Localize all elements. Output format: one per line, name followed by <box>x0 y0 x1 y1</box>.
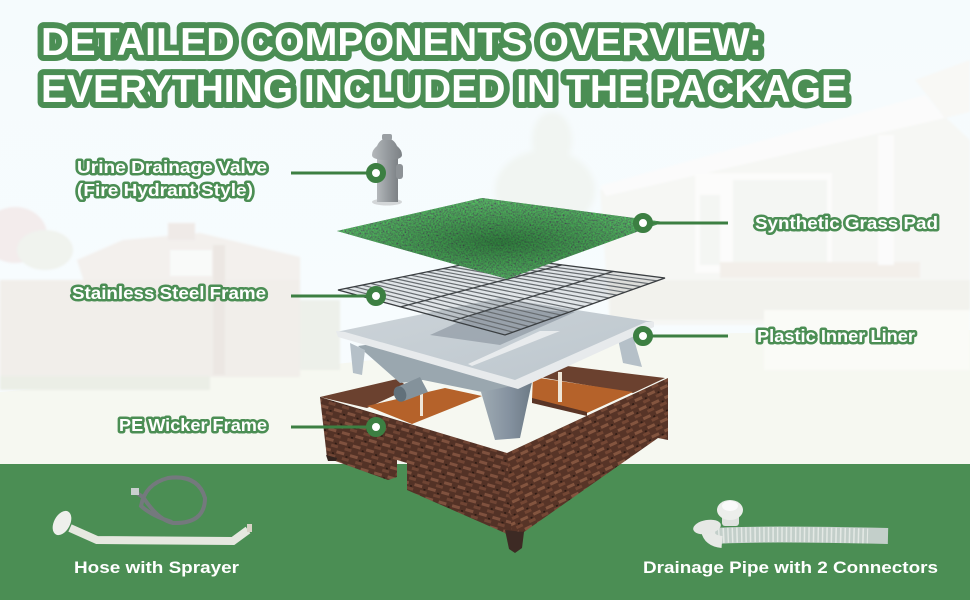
liner funnel body <box>358 340 530 392</box>
pipe elbow <box>707 530 722 542</box>
callout: PE wicker frame: PE Wicker Frame <box>119 415 267 435</box>
icon: drainage pipe with connectors <box>692 500 888 542</box>
liner rim <box>336 322 654 389</box>
urine drainage valve hydrant <box>372 134 403 206</box>
frame outline <box>338 257 665 335</box>
background: right house <box>600 60 970 370</box>
title: DETAILED COMPONENTS OVERVIEW: <box>41 21 762 64</box>
wicker inner orange surface <box>367 372 633 424</box>
hose coil <box>135 477 205 523</box>
hydrant base <box>372 198 402 206</box>
callout: urine drainage valve: Urine Drainage Valve <box>77 157 267 177</box>
green footer band <box>0 464 970 600</box>
frame crossbars <box>401 265 613 321</box>
sprayer tip <box>247 524 252 532</box>
icon: hose with sprayer <box>49 477 252 541</box>
callout: PE wicker frame <box>119 415 383 435</box>
pipe ribs <box>714 534 868 536</box>
callout: urine drainage valve: (Fire Hydrant Style) <box>77 180 253 200</box>
hydrant side nozzle <box>396 164 403 179</box>
wicker front foot <box>505 530 524 553</box>
PE wicker frame <box>320 366 668 553</box>
liner drain spout <box>391 377 428 404</box>
background: tree <box>495 112 595 230</box>
callout: plastic inner liner: Plastic Inner Liner <box>757 326 915 346</box>
title <box>41 21 847 111</box>
wicker back walls <box>320 379 410 408</box>
title: EVERYTHING INCLUDED IN THE PACKAGE <box>41 68 847 111</box>
hose connector <box>131 488 139 495</box>
plastic inner liner <box>336 298 654 440</box>
callout: synthetic grass pad: Synthetic Grass Pad <box>755 213 938 233</box>
sprayer head <box>49 508 75 538</box>
liner tray top <box>336 298 654 386</box>
hydrant dome <box>372 138 402 160</box>
flange connector <box>692 518 722 536</box>
background: lawn <box>0 330 970 464</box>
hydrant body <box>377 158 398 202</box>
liner legs <box>350 343 365 375</box>
pipe body <box>714 534 888 536</box>
callout: stainless steel frame: Stainless Steel Frame <box>72 283 266 303</box>
background: left house and fence <box>0 207 340 390</box>
socket connector <box>717 500 743 526</box>
synthetic grass pad <box>337 198 664 279</box>
frame rods <box>346 259 657 332</box>
callout: urine drainage valve <box>77 157 383 200</box>
stainless steel frame <box>338 257 665 335</box>
callout: synthetic grass pad <box>636 213 938 233</box>
background: faded backyard scene <box>0 0 970 464</box>
wicker right wall <box>507 378 668 538</box>
callout: stainless steel frame <box>72 283 383 303</box>
hydrant top nut <box>382 134 392 140</box>
callout: plastic inner liner <box>636 326 915 346</box>
label: drainage pipe with 2 connectors: Drainage Pipe with 2 Connectors <box>643 558 938 577</box>
label: hose with sprayer: Hose with Sprayer <box>74 558 239 577</box>
wicker left wall <box>320 397 515 538</box>
sprayer tube <box>70 528 248 541</box>
liner grid shadow <box>430 308 575 345</box>
